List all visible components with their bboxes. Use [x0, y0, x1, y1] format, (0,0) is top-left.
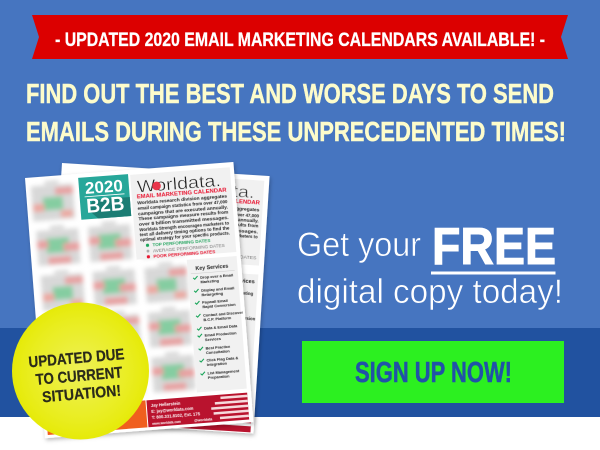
key services panel	[187, 256, 249, 392]
yellow badge: SITUATION!	[42, 383, 122, 406]
yellow badge	[12, 302, 149, 440]
offer text: Get your	[297, 226, 421, 264]
key services panel: Consultation	[206, 348, 230, 355]
key services panel: B.C.P. Platform	[203, 315, 232, 322]
headline	[26, 78, 566, 147]
calendar page: front	[25, 162, 253, 438]
key services panel: Retargeting	[201, 291, 224, 297]
ribbon banner	[32, 15, 568, 59]
info panel: These campaigns measure results from	[138, 210, 228, 221]
info panel: Worldata research division aggregates	[137, 194, 228, 205]
background	[0, 0, 600, 328]
yellow badge: TO CURRENT	[35, 364, 124, 389]
blurred month grid	[30, 171, 196, 401]
key services panel: Click Flag Data &	[206, 355, 239, 363]
info panel: Worldata Strength encourages marketers to	[139, 220, 229, 232]
key services panel: Drop over a Email	[200, 272, 233, 280]
calendar page: back: Rapid Conversion	[219, 314, 256, 321]
calendar page: back: These campaigns measure results from	[168, 218, 259, 228]
calendar page: back: Retargeting	[219, 302, 244, 309]
info panel: campaigns that are executed annually.	[138, 205, 228, 216]
offer text: digital copy today!	[297, 273, 563, 311]
teal 2020 B2B badge: 2020	[84, 177, 124, 198]
red footer: Jay Hellerstein	[151, 401, 181, 408]
key services panel: Key Services	[195, 264, 229, 272]
key services panel: Rapid Conversion	[202, 302, 236, 309]
dark blue band	[0, 328, 600, 417]
key services panel: Display and Email	[201, 285, 235, 293]
red footer: www.worldata.com	[151, 420, 181, 426]
calendar page: back: Worldata.	[170, 178, 255, 202]
teal 2020 B2B badge	[78, 174, 131, 220]
yellow badge: UPDATED DUE	[28, 346, 125, 371]
calendar page: back: Key Services	[220, 277, 255, 285]
info panel: test all delivery timing options to find the	[140, 225, 230, 237]
key services panel: Preparation	[208, 373, 230, 380]
key services panel: Marketing	[200, 278, 220, 284]
orange footer	[46, 400, 147, 435]
offer text	[297, 218, 563, 311]
key services panel: Best Practice	[205, 344, 231, 351]
red footer	[146, 393, 249, 427]
sign up button: SIGN UP NOW!	[355, 357, 512, 389]
calendar page: back: email campaign statistics from over 47,000	[169, 208, 260, 218]
key services panel: Paywall Email	[202, 298, 228, 305]
red footer: T: 800.331.8102, Ext. 175	[152, 411, 201, 420]
key services panel: Email Production	[204, 330, 237, 338]
calendar page: back: Integration	[215, 372, 238, 378]
calendar page: back: Consultation	[216, 360, 243, 367]
calendar page: back: over 8 billion transmitted messages.	[168, 224, 258, 234]
calendar page: back: Email Marketing	[220, 289, 254, 296]
calendar page: back: AVERAGE PERFORMING DATES	[178, 251, 257, 260]
key services panel: Integration	[207, 361, 228, 367]
calendar page: back: Worldata Strength encourages marketers to	[168, 229, 258, 239]
red footer: @worldata	[194, 417, 214, 423]
calendar page: back: campaigns that are executed annually.	[169, 213, 259, 223]
info panel: email campaign statistics from over 47,000	[137, 199, 228, 211]
legend: AVERAGE PERFORMING DATES	[153, 243, 225, 253]
logo: Worldata.	[136, 171, 221, 196]
key services panel: Contact and Discover	[203, 310, 244, 318]
calendar page: back: Platform	[218, 327, 236, 333]
calendar page: back: Worldata research division aggregates	[169, 202, 260, 213]
legend: POOR PERFORMING DATES	[153, 249, 216, 259]
legend	[146, 237, 226, 259]
key services panel: Services	[205, 336, 221, 342]
key services panel: Data & Email Data	[204, 323, 238, 331]
red footer: E: jay@worldata.com	[151, 406, 194, 414]
sign up button	[302, 341, 564, 403]
calendar page: back: EMAIL MARKETING CALENDAR	[170, 195, 260, 207]
calendar page: back	[46, 163, 270, 434]
info panel	[130, 167, 236, 260]
calendar page: back: Services	[216, 347, 235, 353]
key services panel: List Management	[207, 368, 240, 376]
teal 2020 B2B badge: B2B	[86, 193, 125, 218]
info panel: optimal strategy for your specific products.	[140, 230, 230, 242]
offer text: FREE	[432, 218, 556, 276]
info panel: over 8 billion transmitted messages.	[139, 215, 229, 227]
legend: TOP PERFORMING DATES	[152, 238, 211, 247]
info panel: EMAIL MARKETING CALENDAR	[137, 188, 227, 200]
